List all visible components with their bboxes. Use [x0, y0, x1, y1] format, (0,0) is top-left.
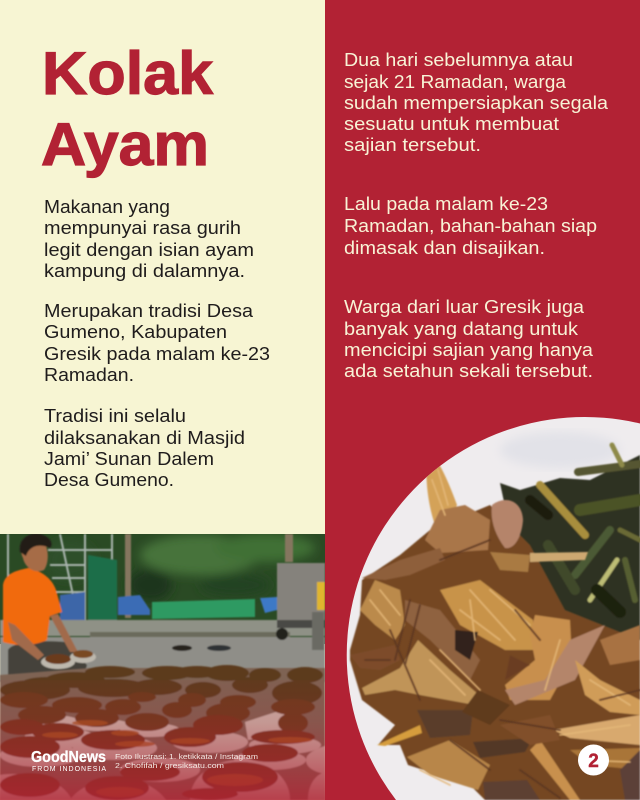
title [41, 40, 214, 178]
page number badge: 2 [588, 751, 599, 772]
text block: tradition: Merupakan tradisi Desa [44, 301, 254, 321]
logo: GoodNews from Indonesia: GoodNews [31, 749, 106, 766]
text block: visitors: Warga dari luar Gresik juga [344, 297, 585, 317]
text block: tradition: Gumeno, Kabupaten [44, 322, 227, 342]
title: Kolak [42, 40, 214, 107]
panel: cream left background [0, 0, 325, 800]
text block: mosque: dilaksanakan di Masjid [44, 428, 245, 448]
text block: cooking: Lalu pada malam ke-23 [344, 194, 548, 214]
text block: mosque: Tradisi ini selalu [44, 406, 186, 426]
text block: preparation: sejak 21 Ramadan, warga [344, 72, 567, 92]
text block: tradition [44, 301, 270, 385]
text block: cooking: Ramadan, bahan-bahan siap [344, 216, 597, 236]
photo: plate of kolak ayam [340, 415, 640, 800]
logo: GoodNews from Indonesia: FROM INDONESIA [32, 766, 106, 773]
photo credits [115, 752, 258, 770]
page number badge [578, 744, 609, 776]
text block: visitors: banyak yang datang untuk [344, 319, 579, 339]
photo credits: Foto Ilustrasi: 1. ketikkata / Instagram [115, 752, 258, 761]
text block: cooking [344, 194, 597, 258]
title: Ayam [41, 111, 209, 178]
red gradient overlay [0, 680, 325, 800]
text block: tradition: Gresik pada malam ke-23 [44, 344, 270, 364]
text block: cooking: dimasak dan disajikan. [344, 238, 545, 258]
text block: description [44, 197, 254, 281]
text block: visitors: ada setahun sekali tersebut. [344, 361, 593, 381]
text block: preparation: sudah mempersiapkan segala [344, 93, 609, 113]
logo: GoodNews from Indonesia [31, 749, 106, 773]
text block: mosque: Desa Gumeno. [44, 470, 174, 490]
text block: mosque: Jami’ Sunan Dalem [44, 449, 214, 469]
ladder scaffold [8, 534, 112, 625]
text block: visitors: mencicipi sajian yang hanya [344, 340, 594, 360]
text block: visitors [344, 297, 594, 381]
text block: description: kampung di dalamnya. [44, 261, 245, 281]
text block: description: Makanan yang [44, 197, 170, 217]
plates of food [0, 665, 325, 800]
shredded chicken [350, 452, 640, 800]
photo credits: 2. Chofifah / gresiksatu.com [115, 761, 224, 770]
text block: mosque [44, 406, 245, 490]
greens [500, 445, 640, 640]
text block: tradition: Ramadan. [44, 365, 134, 385]
man [8, 641, 87, 676]
text block: preparation [344, 50, 609, 155]
white plate [340, 415, 640, 800]
photo: villager with rows of kolak ayam plates [0, 534, 325, 800]
text block: preparation: Dua hari sebelumnya atau [344, 50, 573, 70]
panel: red right background [325, 0, 640, 800]
text block: preparation: sesuatu untuk membuat [344, 114, 559, 134]
text block: description: legit dengan isian ayam [44, 240, 254, 260]
text block: description: mempunyai rasa gurih [44, 218, 241, 238]
text block: preparation: sajian tersebut. [344, 135, 481, 155]
